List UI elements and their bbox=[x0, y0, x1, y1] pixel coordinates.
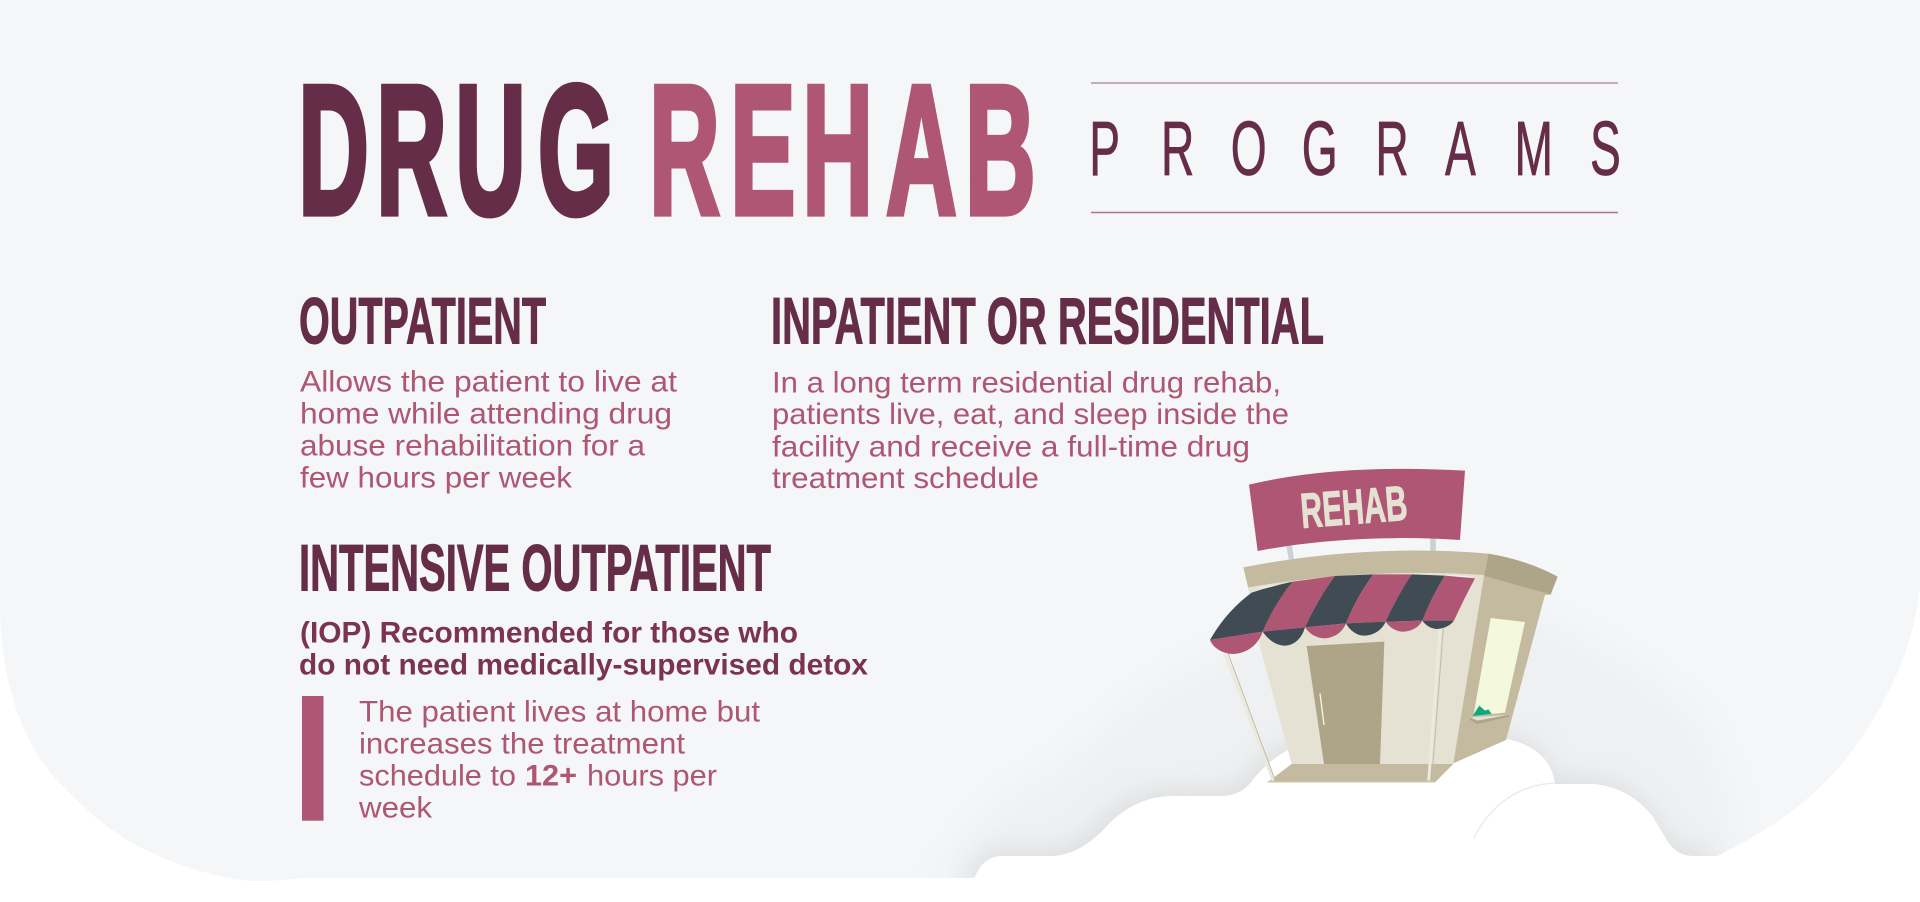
building front wall bbox=[1248, 576, 1484, 764]
doorstep bbox=[1267, 764, 1453, 782]
heading: outpatient: OUTPATIENT bbox=[299, 284, 546, 358]
cloud shadow bbox=[961, 720, 1720, 878]
accent bar bbox=[302, 696, 324, 821]
sign posts bbox=[1286, 535, 1436, 559]
subtitle: programs: PROGRAMS bbox=[1089, 107, 1621, 192]
door bbox=[1307, 642, 1384, 764]
awning poles bbox=[1225, 628, 1443, 781]
title: DRUG bbox=[298, 49, 614, 253]
text: IOP description: The patient lives at home but bbox=[359, 696, 761, 729]
text: IOP description bbox=[358, 696, 761, 824]
text: inpatient description: In a long term residential drug rehab, bbox=[772, 367, 1281, 400]
text: IOP description: week bbox=[358, 791, 433, 824]
section: inpatient or residential bbox=[771, 284, 1324, 495]
section: intensive outpatient bbox=[299, 530, 869, 824]
section: outpatient bbox=[299, 284, 678, 494]
building side wall bbox=[1453, 576, 1551, 763]
text: IOP recommendation: do not need medically-supervised detox bbox=[299, 648, 869, 681]
text: inpatient description: treatment schedule bbox=[772, 462, 1039, 495]
roof bbox=[1243, 551, 1558, 595]
text: IOP description: increases the treatment bbox=[359, 727, 686, 760]
title: REHAB bbox=[649, 49, 1036, 253]
text: inpatient description bbox=[772, 367, 1289, 495]
text: outpatient description: few hours per week bbox=[300, 461, 573, 494]
side window with plant bbox=[1470, 618, 1525, 724]
text: outpatient description: home while attending drug bbox=[300, 397, 672, 430]
text: IOP recommendation: (IOP) Recommended for those who bbox=[300, 617, 798, 650]
striped awning bbox=[1210, 574, 1475, 654]
text: IOP description: schedule to bbox=[359, 760, 516, 793]
rehab sign bbox=[1249, 469, 1465, 551]
heading: inpatient or residential: INPATIENT OR RESIDENTIAL bbox=[771, 284, 1324, 358]
text: IOP recommendation bbox=[299, 617, 869, 681]
heading: intensive outpatient: INTENSIVE OUTPATIENT bbox=[299, 530, 771, 604]
rehab sign: REHAB bbox=[1299, 476, 1409, 539]
text: IOP description: 12+ bbox=[525, 760, 577, 793]
text: outpatient description: abuse rehabilitation for a bbox=[300, 430, 645, 463]
text: IOP description: hours per bbox=[587, 760, 717, 793]
text: outpatient description: Allows the patient to live at bbox=[300, 366, 678, 399]
text: inpatient description: facility and receive a full-time drug bbox=[772, 431, 1250, 464]
illustration: rehab storefront bbox=[1210, 469, 1558, 782]
text: inpatient description: patients live, eat, and sleep inside the bbox=[772, 398, 1289, 431]
text: outpatient description bbox=[300, 366, 678, 494]
white cloud bbox=[974, 739, 1730, 902]
